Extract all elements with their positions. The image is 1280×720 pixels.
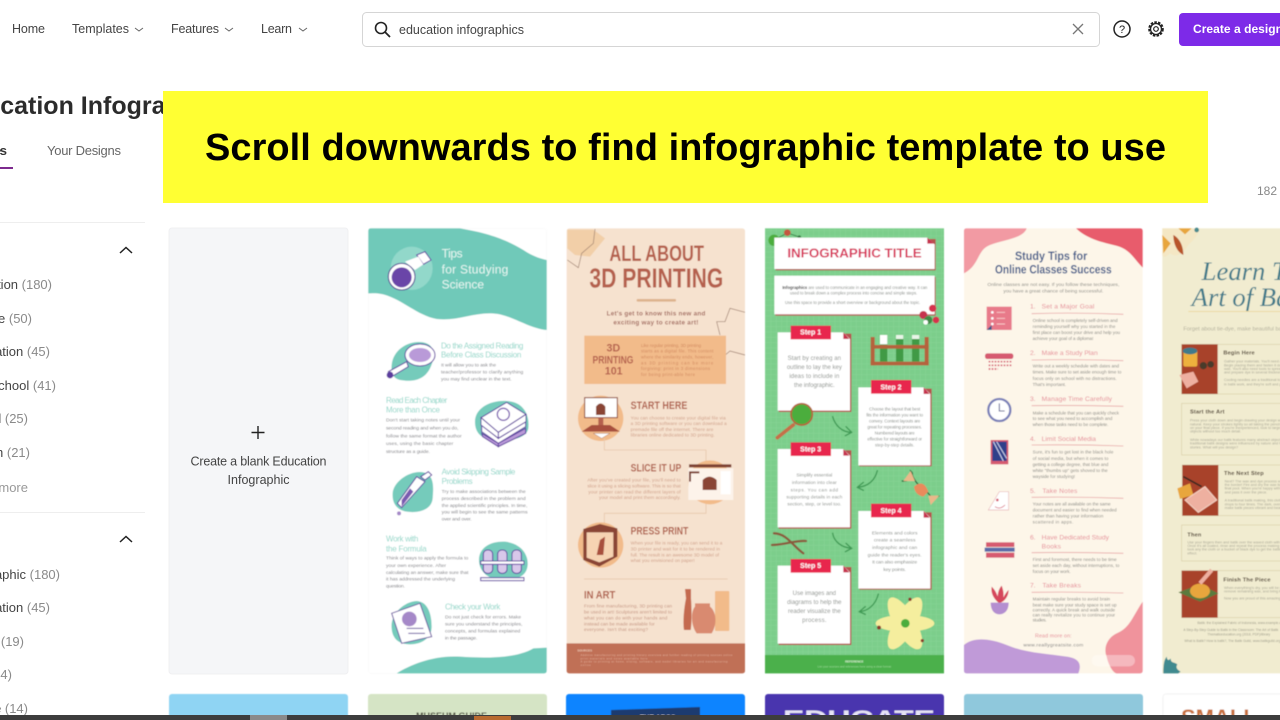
icon: settings gear: [1150, 22, 1162, 36]
item 7: 7.: [1030, 583, 1036, 590]
bottom wave: [397, 648, 547, 673]
3D printing 101 box: 3D: [607, 343, 620, 355]
read more link: www.reallygreatsite.com: [1023, 643, 1083, 649]
item 4: 4.: [1030, 436, 1036, 443]
card subtitle: Let's get to know this new and: [607, 310, 705, 317]
item 7: [991, 583, 1117, 623]
3D printing 101 box: where the similarity ends, however,: [641, 355, 713, 360]
tip 3: process described in the problem and: [442, 496, 526, 502]
nav links: Templates: [72, 22, 129, 36]
template card: Tips for Studying Science: [368, 228, 547, 673]
step 4: [858, 504, 932, 590]
3D printing 101 box: PRINTING: [592, 354, 633, 366]
step: slice it up: slice it using a slicing software. This is so that: [587, 484, 681, 489]
tip 2: second reading and when you do,: [386, 425, 458, 431]
item 1: achieve your goal of a diploma!: [1033, 336, 1093, 341]
3D printing 101 box: [584, 336, 726, 384]
tip 4: calculating an answer, make sure that: [386, 570, 469, 576]
icon: chromosome: [772, 533, 806, 553]
3D printing 101 box: for being print-able here: [641, 372, 696, 377]
section: in art: what you can do with your hands and: [584, 616, 668, 621]
tip 3: [393, 468, 528, 523]
step: then: effect.: [1187, 551, 1197, 555]
item 1: reminding yourself why you started in the: [1033, 324, 1116, 329]
footer band: REFERENCE: [845, 659, 864, 663]
card title: [442, 247, 508, 291]
intro box: Use this space to provide a short overview or background about the topic.: [785, 300, 920, 305]
read more link: Read more on:: [1035, 634, 1072, 640]
step 4: guide the reader's eyes.: [868, 552, 922, 558]
tip 5: sure you understand the principles,: [445, 622, 522, 628]
step 2: fits the information you want to: [866, 413, 924, 418]
title box: INFOGRAPHIC TITLE: [787, 246, 922, 261]
step: start the art: [1182, 403, 1280, 455]
thumbnail: white with orange heading: [1163, 694, 1280, 720]
card subtitle: [987, 282, 1119, 295]
step 4: key points.: [883, 567, 906, 573]
molecule icon: [768, 229, 801, 246]
item 2: 2.: [1030, 350, 1036, 357]
item 4: white "thumbs up" gets shoved to the: [1033, 468, 1108, 473]
item 5: 5.: [1030, 488, 1036, 495]
step: slice it up: SLICE IT UP: [631, 462, 681, 474]
step 1: [778, 326, 851, 412]
step: finish the piece: [1178, 570, 1280, 618]
tip 2: follow the same format the author: [386, 433, 462, 439]
item 1: Set a Major Goal: [1042, 304, 1095, 311]
title box: [774, 238, 936, 270]
step: start here: START HERE: [631, 400, 687, 412]
step: start here: a 3D printing software or you can download a: [631, 421, 727, 426]
step: start here: [578, 396, 727, 441]
intro box: [774, 276, 936, 316]
item 1: [987, 304, 1120, 341]
tip 1: you may find unclear in the text.: [441, 376, 512, 382]
item 6: focus on your work.: [1033, 569, 1071, 574]
item 6: Books: [1042, 543, 1062, 550]
item 2: focus only on school with no distractions.: [1033, 376, 1117, 381]
sources footer: [567, 643, 745, 673]
step 2: convey. Context layouts are: [869, 419, 921, 424]
item 3: Manage Time Carefully: [1042, 396, 1113, 403]
item 6: 6.: [1030, 534, 1036, 541]
item 7: can really revitalize you to continue your: [1033, 613, 1115, 618]
intro box: used to break down a complex process into concise and simple steps.: [790, 291, 917, 296]
step 1: ideas to include in: [789, 374, 839, 380]
step: then: [1182, 525, 1280, 561]
template card: Learn The Art of Batik: [1162, 228, 1280, 673]
step 2: effective for straightforward or: [867, 437, 923, 442]
step 3: Step 3: [800, 446, 821, 453]
video scrub bar: [0, 715, 1280, 720]
arrow: [859, 594, 878, 614]
icon: magnifier: [777, 404, 812, 438]
references: [1183, 621, 1280, 643]
icon: flask: [388, 247, 433, 290]
item 7: correctly. A quick break and walk outside: [1033, 608, 1115, 613]
step: start here: libraries online dedicated to 3D printing.: [631, 433, 715, 438]
tabs: Your Designs: [47, 143, 122, 158]
intro box: Infographics are used to communicate in an engaging and creative way. It can: [782, 285, 928, 290]
step 2: Numbered layouts are: [875, 431, 915, 436]
item 4: wayside for studying!: [1033, 474, 1075, 479]
search box: education infographics: [399, 23, 524, 37]
footer band: List your sources and references here using a clear format: [818, 664, 891, 668]
step 5: reader visualize the: [788, 609, 841, 615]
thumbnail: light blue: [169, 694, 348, 720]
tip 3: you will begin to see the same patterns: [442, 510, 528, 516]
card title: Study Tips for: [1015, 250, 1088, 263]
template card: All About 3D Printing: [567, 228, 745, 673]
references: A Step-By-Step Guide to Batik in the Classroom: The Art of Batik: [1183, 628, 1279, 632]
arrow: [857, 471, 877, 490]
step 4: It can also emphasize: [872, 560, 917, 566]
step 5: Use images and: [793, 591, 836, 597]
step: slice it up: [587, 460, 733, 504]
step 2: Step 2: [881, 384, 902, 391]
sources footer: print materials and notes available here: [581, 657, 648, 660]
item 2: That's important.: [1033, 382, 1066, 387]
section: in art: IN ART: [584, 589, 616, 601]
item 3: Make a schedule that you can quickly check: [1033, 410, 1120, 415]
yellow caption banner: [163, 91, 1208, 203]
tip 3: Try to make associations between the: [442, 489, 526, 495]
blank template card: [169, 228, 348, 674]
step 3: Simplify essential: [796, 473, 832, 478]
yellow caption banner: Scroll downwards to find infographic template to use: [205, 127, 1166, 169]
references: Thematiceducation.org (2018, PDF)/library: [1207, 633, 1271, 637]
create a design button: [1179, 13, 1280, 46]
icon: berries: [919, 305, 939, 325]
read more link: [1023, 634, 1083, 649]
top wave: [368, 228, 547, 330]
nav links: Learn: [261, 22, 292, 36]
thumbnail: sage green: [368, 694, 547, 720]
tip 5: concepts, and formulas explained: [445, 629, 521, 635]
step: slice it up: your printer can read the different layers of: [588, 489, 681, 494]
filter group: topic: [0, 248, 132, 495]
sources footer: online: [581, 664, 591, 667]
nav links: Home: [12, 22, 45, 36]
tip 2: Don't start taking notes until your: [386, 418, 460, 424]
step 4: Elements and colors: [872, 530, 918, 536]
3D printing 101 box: starts as a digital file. This content: [641, 349, 714, 354]
step: press print: 3D printer and wait for it to be rendered in: [631, 546, 720, 551]
step 1: Step 1: [800, 330, 821, 337]
template gallery: [368, 228, 1280, 673]
card title: ALL ABOUT: [609, 241, 704, 266]
card subtitle: [607, 310, 705, 326]
step 1: Start by creating an: [788, 356, 841, 362]
step: press print: When your file is ready, you can send it to a: [631, 540, 723, 545]
step 5: diagrams to help the: [787, 600, 842, 606]
step 3: [778, 442, 851, 529]
item 5: rather than having your information: [1033, 514, 1104, 519]
card subtitle: exciting way to create art!: [613, 319, 698, 326]
sources footer: Additive manufacturing and printing history overview and further reading of printing sources online: [581, 654, 733, 657]
item 4: [991, 436, 1114, 479]
item 5: Your notes are all available on the same: [1033, 502, 1111, 507]
card title: [995, 250, 1112, 277]
item 7: Maintain regular breaks to avoid brain: [1033, 597, 1110, 602]
step: start the art: Start the Art: [1190, 410, 1225, 416]
tip 2: Read Each Chapter: [386, 396, 448, 405]
tip 2: uses, using the basic chapter: [386, 441, 454, 447]
step 5: process.: [802, 618, 827, 624]
step 2: Choose the layout that best: [869, 407, 921, 412]
step 3: information into clear: [792, 480, 837, 485]
step 2: step-by-step details.: [875, 443, 914, 448]
search box: [362, 12, 1100, 46]
icon: help: ?: [1119, 24, 1125, 36]
step: slice it up: your model and print them accordingly.: [599, 495, 681, 500]
step 3: steps. You can add: [791, 487, 838, 492]
item 6: First and foremost, there needs to be time: [1033, 557, 1117, 562]
filter sidebar: [0, 222, 145, 716]
3D printing 101 box: Like regular printing, 3D printing: [641, 343, 702, 348]
step 2: [858, 380, 932, 466]
decorative corner shapes: [567, 229, 745, 357]
tip 4: your own experience. After: [386, 563, 446, 569]
item 2: Make a Study Plan: [1042, 350, 1098, 357]
tip 4: the Formula: [386, 544, 427, 553]
template card: Infographic Title: [765, 228, 944, 673]
arrow: [833, 417, 852, 436]
card subtitle: Online classes are not easy. If you follow these techniques,: [987, 282, 1119, 288]
card title: for Studying: [442, 262, 508, 276]
connector: [604, 438, 706, 523]
sources footer: SOURCES: [577, 648, 592, 652]
tip 1: It will allow you to ask the: [441, 362, 496, 368]
item 3: [988, 396, 1120, 427]
item 1: 1.: [1030, 304, 1036, 311]
section: in art: be used in art! Sculptures aren't limited to: [584, 610, 672, 615]
section: in art: instead can be made available for: [584, 621, 655, 626]
template card: Study Tips: [964, 228, 1143, 673]
result count: 182: [1257, 184, 1277, 198]
item 3: to see what you need to accomplish and: [1033, 416, 1113, 421]
step: then: Then: [1187, 532, 1202, 538]
card title: Tips: [442, 247, 463, 261]
leaf decoration top: [1162, 228, 1200, 257]
step: then: look any the cloth or a bucket of black dye to get the batik: [1187, 548, 1280, 552]
blank template card: Infographic: [228, 473, 290, 487]
corner blobs: [964, 228, 1143, 673]
step 2: great for repeating processes.: [867, 425, 922, 430]
tip 2: structure as a guide.: [386, 449, 430, 455]
top navigation bar: [12, 12, 1280, 46]
item 1: Online school is completely self-driven and: [1033, 318, 1118, 323]
tip 1: [387, 341, 524, 382]
tip 2: More than Once: [386, 406, 441, 415]
section: in art: [584, 589, 729, 633]
icon: help: [1114, 21, 1130, 37]
tip 3: Avoid Skipping Sample: [442, 468, 516, 477]
step 5: [778, 559, 851, 645]
item 2: Write out a weekly schedule with dates and: [1033, 364, 1119, 369]
item 2: [985, 350, 1122, 387]
step 4: infographic and can: [872, 545, 917, 551]
item 3: when those tasks need to be complete.: [1033, 422, 1108, 427]
item 6: [985, 534, 1120, 574]
item 4: Limit Social Media: [1042, 436, 1096, 443]
step: start here: You can choose to create your digital file via: [631, 415, 726, 420]
step: the next step: The Next Step: [1224, 471, 1264, 477]
tip 3: over and over.: [442, 517, 472, 523]
card title: Science: [442, 277, 484, 291]
step: start the art: stories. What will you design?: [1190, 445, 1238, 449]
step: press print: full. The result is an awesome 3D model of: [631, 552, 720, 557]
tip 4: it has addressed the underlying: [386, 577, 455, 583]
step 1: outline to lay the key: [787, 365, 842, 371]
step 4: Step 4: [881, 508, 902, 515]
sources footer: A guide to printing at home, slicing, software, and model libraries for art and manufacturing: [581, 661, 728, 664]
tip 5: [392, 601, 522, 644]
item 6: set aside each day, without interruptions, to: [1033, 563, 1120, 568]
tip 4: Think of ways to apply the formula to: [386, 556, 469, 562]
tip 5: Check your Work: [445, 603, 500, 612]
item 7: studies.: [1033, 618, 1047, 623]
step: begin here: Begin Here: [1223, 350, 1255, 356]
3D printing 101 box: forgiving: print in 3 dimensions: [641, 366, 710, 371]
step 5: Step 5: [800, 563, 821, 570]
card title: 3D PRINTING: [589, 263, 723, 294]
item 4: of social media, but when it comes to: [1033, 456, 1109, 461]
item 1: first place can boost your drive and help you: [1033, 330, 1120, 335]
tip 3: Problems: [442, 477, 473, 486]
tip 1: teacher/professor to clarify anything: [441, 370, 524, 376]
tip 4: question.: [386, 584, 405, 590]
tip 5: Do not just check for errors. Make: [445, 614, 521, 620]
item 6: Have Dedicated Study: [1042, 534, 1110, 541]
thumbnail: teal blue: [964, 694, 1143, 720]
3D printing 101 box: as 3D printing can be more: [641, 360, 714, 365]
step: start the art: on your final piece. If you're inexperienced, look to large: [1190, 426, 1280, 430]
leaf decoration bottom: [1163, 657, 1181, 673]
step 3: supporting details in each: [786, 494, 843, 499]
tip 4: [386, 535, 528, 590]
step: press print: [578, 522, 723, 568]
step: finish the piece: Finish The Piece: [1223, 578, 1271, 584]
item 5: scattered in apps.: [1033, 519, 1073, 524]
item 5: [988, 488, 1117, 524]
icon: DNA strand: [902, 471, 939, 505]
step 3: section, step, or level too.: [787, 501, 841, 506]
thumbnail: blue: [566, 694, 745, 720]
step: slice it up: After you've created your file, you'll need to: [587, 478, 681, 483]
step: start the art: objects without too much detail.: [1190, 430, 1241, 434]
blank template card: Create a blank Education: [190, 454, 327, 468]
step 4: create a seamless: [874, 538, 916, 544]
icon: test tube rack: [871, 335, 929, 365]
tip 2: [386, 396, 529, 455]
nav links: Features: [171, 22, 219, 36]
step: the next step: and pass it over the piece.: [1225, 490, 1267, 494]
card title: [1190, 256, 1280, 312]
tabs: [0, 143, 122, 169]
next row of template thumbnails: [169, 694, 1280, 720]
step: press print: what you envisioned on paper!: [631, 558, 695, 563]
tip 1: Before Class Discussion: [441, 351, 521, 360]
card subtitle: you have a great chance of being successful.: [1003, 289, 1103, 295]
3D printing 101 box: 101: [605, 366, 623, 378]
tip 3: the applied scientific principles. In time,: [442, 503, 527, 509]
section: in art: everyone. Isn't that exciting?: [584, 627, 648, 632]
references: What is Batik? How is batik?, The Batik Guild, www.batikguild.org: [1184, 639, 1280, 643]
footer band: [765, 655, 944, 673]
step 1: the infographic.: [794, 383, 835, 389]
item 4: getting a college degree, that blue and: [1033, 462, 1109, 467]
card title: [589, 241, 723, 294]
thumbnail: indigo: [765, 694, 944, 720]
item 7: beat make sure your study space is set up: [1033, 602, 1117, 607]
step: begin here: [1179, 344, 1280, 394]
section: in art: From fine manufacturing, 3D printing can: [584, 604, 672, 609]
step: start here: premade file off the internet. There are: [631, 427, 714, 432]
tip 4: Work with: [386, 535, 418, 544]
icon: atom: [876, 593, 934, 654]
item 3: 3.: [1030, 396, 1036, 403]
nav links: [12, 22, 307, 36]
item 5: document and easier to find when needed: [1033, 508, 1117, 513]
tip 5: in the passage.: [445, 635, 477, 641]
card title: Online Classes Success: [995, 264, 1112, 277]
filter group: style: [0, 536, 132, 716]
tip 1: Do the Assigned Reading: [441, 341, 523, 350]
item 5: Take Notes: [1042, 488, 1078, 495]
item 2: times. Make sure to set aside enough time to: [1033, 370, 1122, 375]
step: press print: PRESS PRINT: [631, 526, 689, 538]
item 4: Sure, it's fun to get lost in the black hole: [1033, 450, 1114, 455]
step: the next step: [1177, 465, 1280, 516]
item 7: Take Breaks: [1042, 583, 1082, 590]
arrow: [833, 533, 852, 552]
